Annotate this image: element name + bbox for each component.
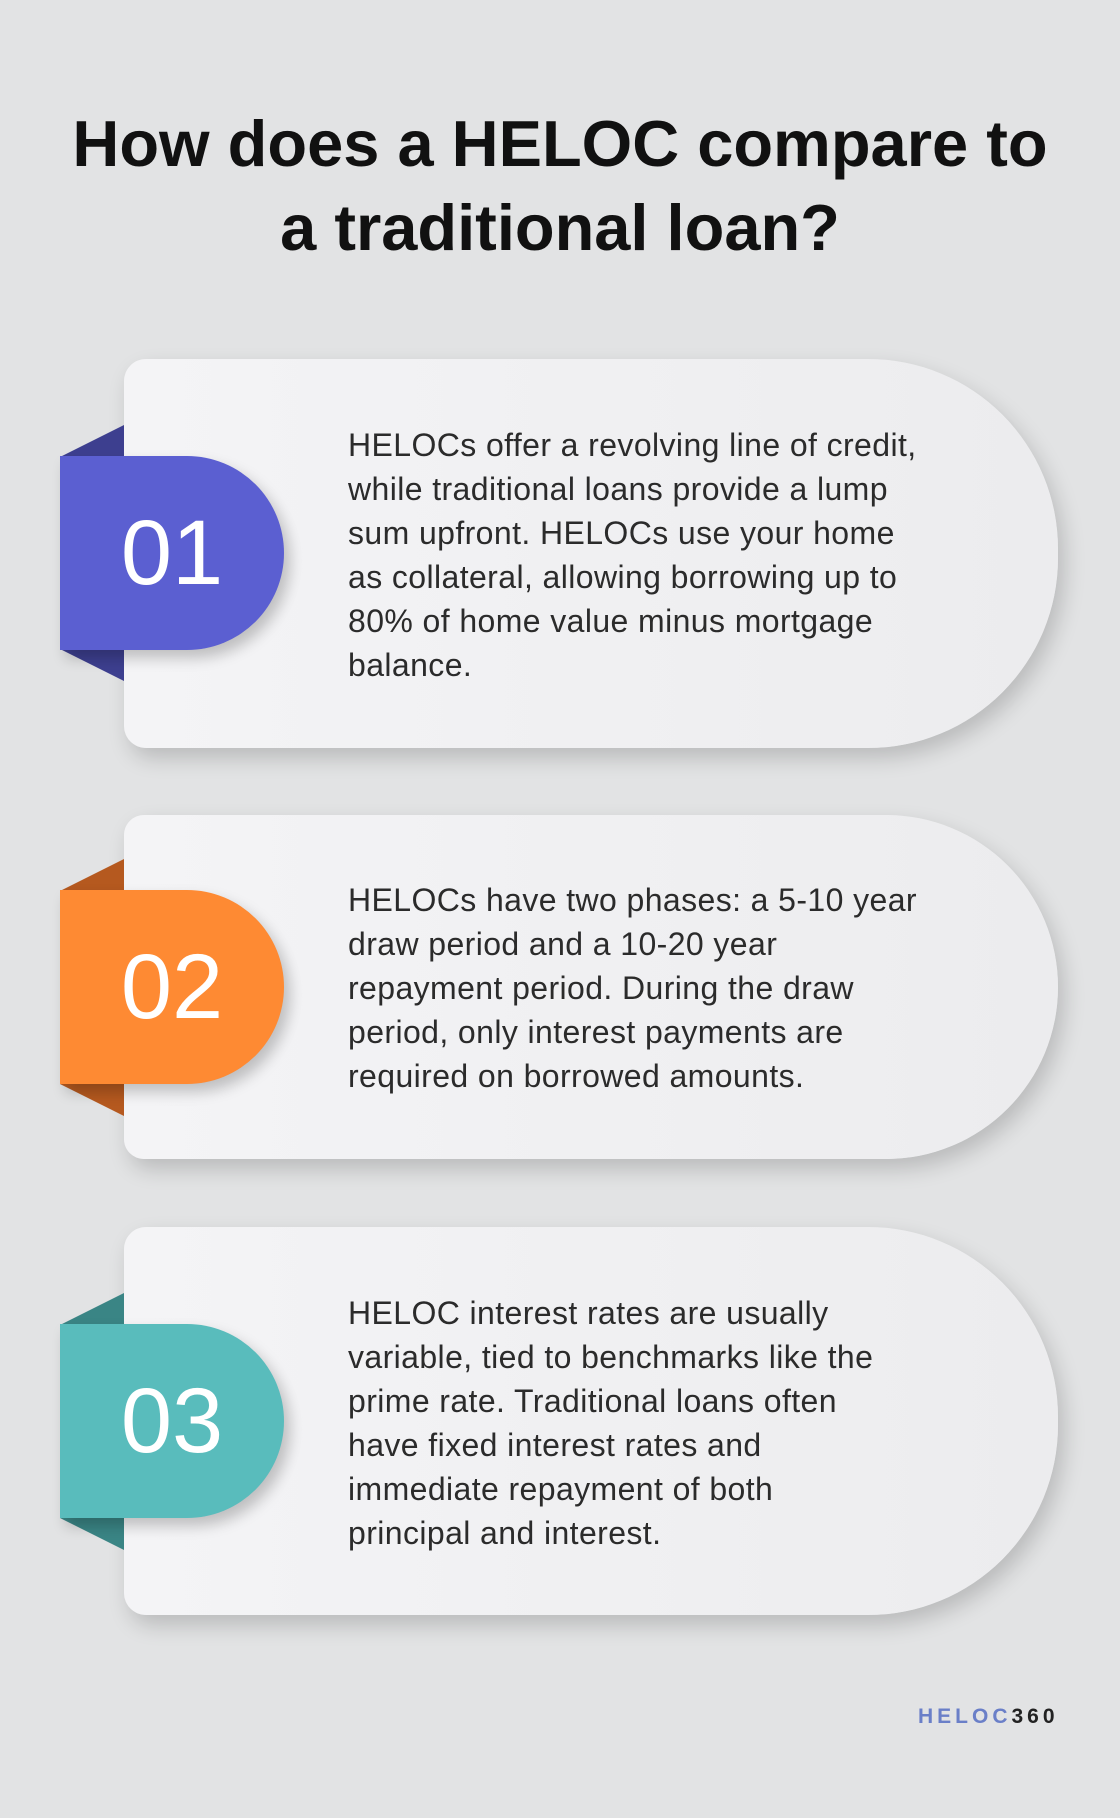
fold top 1 <box>62 425 124 456</box>
badge 02 <box>60 890 284 1084</box>
text 3: variable, tied to benchmarks like the <box>348 1339 873 1375</box>
title: a traditional loan? <box>280 191 840 264</box>
text 3: immediate repayment of both <box>348 1471 773 1507</box>
text 3: prime rate. Traditional loans often <box>348 1383 837 1419</box>
title <box>72 107 1048 264</box>
fold top 3 <box>62 1293 124 1324</box>
text 1: HELOCs offer a revolving line of credit, <box>348 427 917 463</box>
fold bottom 1 <box>62 650 124 681</box>
text 3: principal and interest. <box>348 1515 661 1551</box>
badge 03 <box>60 1324 284 1518</box>
panel: card 3 <box>124 1227 1058 1615</box>
text 3: HELOC interest rates are usually <box>348 1295 829 1331</box>
fold top 2 <box>62 859 124 890</box>
badge 03: 03 <box>121 1370 223 1472</box>
badge 01: 01 <box>121 502 223 604</box>
badge 01 <box>60 456 284 650</box>
badge 02: 02 <box>121 936 223 1038</box>
text 1: while traditional loans provide a lump <box>348 471 888 507</box>
panel: card 1 <box>124 359 1058 748</box>
text 1: 80% of home value minus mortgage <box>348 603 873 639</box>
text 2: repayment period. During the draw <box>348 970 854 1006</box>
text 1: sum upfront. HELOCs use your home <box>348 515 895 551</box>
text 3: have fixed interest rates and <box>348 1427 762 1463</box>
fold bottom 2 <box>60 1084 124 1116</box>
text 1 <box>348 427 917 683</box>
logo: HELOC360 <box>918 1705 1059 1728</box>
text 2: draw period and a 10-20 year <box>348 926 777 962</box>
text 2: HELOCs have two phases: a 5-10 year <box>348 882 917 918</box>
text 3 <box>348 1295 873 1551</box>
text 2: period, only interest payments are <box>348 1014 844 1050</box>
text 2 <box>348 882 917 1094</box>
text 1: as collateral, allowing borrowing up to <box>348 559 897 595</box>
panel: card 2 <box>124 815 1058 1159</box>
text 1: balance. <box>348 647 472 683</box>
title: How does a HELOC compare to <box>72 107 1048 180</box>
fold bottom 3 <box>60 1518 124 1550</box>
text 2: required on borrowed amounts. <box>348 1058 804 1094</box>
